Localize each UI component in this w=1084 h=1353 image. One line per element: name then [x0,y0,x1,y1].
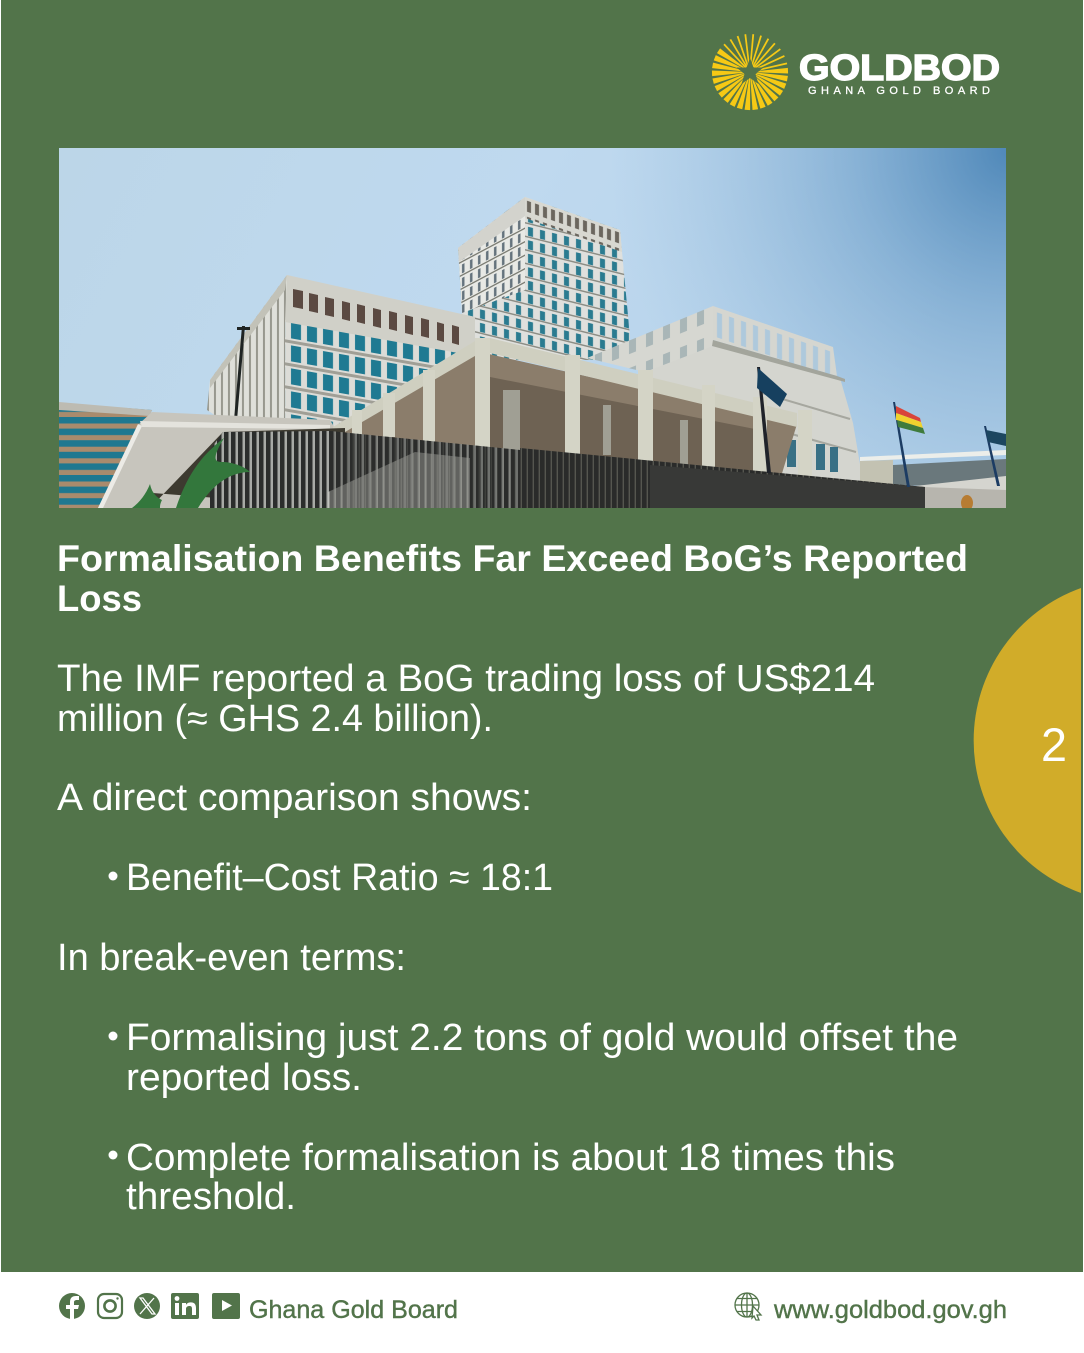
icon: X [134,1293,160,1319]
sky [59,148,1006,508]
icon: facebook [59,1293,85,1319]
fence centre section [330,431,520,508]
intro paragraph [57,658,875,740]
footer organisation name: Ghana Gold Board [249,1296,458,1324]
bullet: benefit-cost ratio: Benefit–Cost Ratio ≈ 18:1 [126,857,553,899]
low structure and railing at right [860,450,1006,511]
logo: Goldbod [712,34,1000,110]
plant [132,438,250,508]
flag: right flag [984,426,1006,486]
icon: gold sun [712,34,788,110]
left building [207,275,475,432]
bullet: offset loss: Formalising just 2.2 tons of gold would offset the [126,1017,958,1059]
central tower [458,197,630,360]
icon: globe with cursor [735,1293,761,1320]
light pole [234,326,250,416]
right building [587,306,863,482]
fence right section [520,448,925,508]
icon: linkedin [171,1293,199,1319]
bullet: offset loss: reported loss. [126,1057,362,1099]
footer website: www.goldbod.gov.gh [773,1296,1007,1324]
logo wordmark: GOLDBOD [799,47,1000,88]
bullet: offset loss [108,1017,958,1099]
flag: Ghana flag [893,402,925,487]
grey concrete block [98,412,336,508]
bullet: complete formalisation [108,1137,895,1218]
bullet: complete formalisation: threshold. [126,1176,296,1218]
canopy back columns [503,390,688,465]
icon: instagram [98,1294,122,1318]
intro paragraph: million (≈ GHS 2.4 billion). [57,698,493,740]
low building at left [59,403,152,508]
heading: Loss [57,578,142,619]
footer [59,1293,1007,1324]
heading [57,538,968,619]
bullet: complete formalisation: Complete formalisation is about 18 times this [126,1137,895,1179]
canopy ceiling [345,352,797,480]
palm-side dark slope [154,428,345,498]
fence left section [210,431,330,508]
page number badge [974,588,1081,893]
icon: youtube [212,1293,240,1319]
canopy beams [333,338,797,439]
comparison lead-in: A direct comparison shows: [57,777,532,819]
flag: blue flag [757,367,787,473]
heading: Formalisation Benefits Far Exceed BoG’s Reported [57,538,968,579]
break-even lead-in: In break-even terms: [57,937,406,979]
logo tagline: GHANA GOLD BOARD [808,85,990,97]
page number badge: 2 [1041,718,1067,771]
photo: Bank of Ghana building complex [59,148,1006,511]
intro paragraph: The IMF reported a BoG trading loss of US$214 [57,658,875,700]
canopy columns [352,338,812,482]
